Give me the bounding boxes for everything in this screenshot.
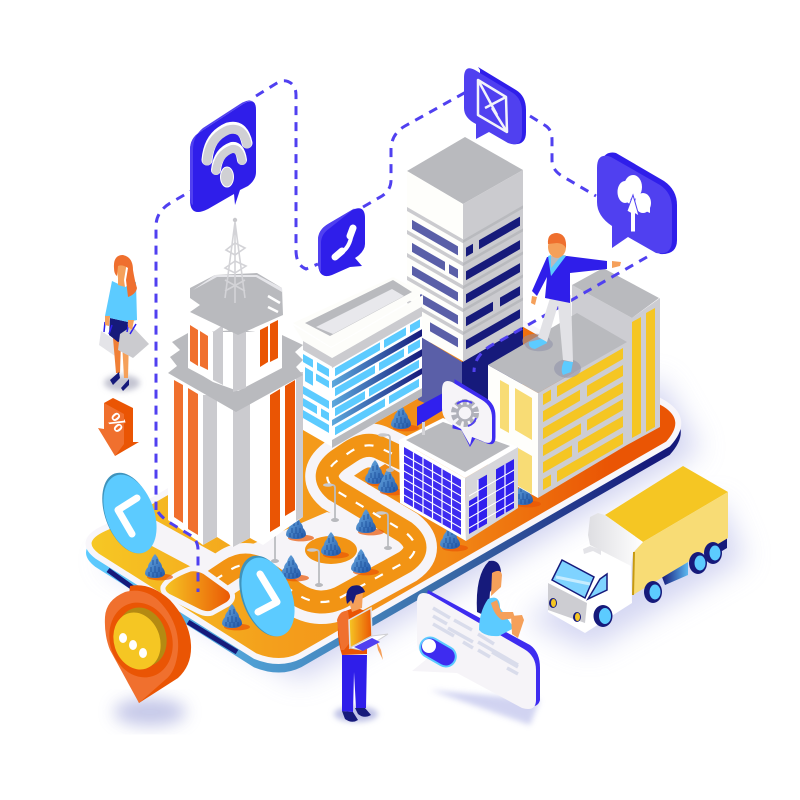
front leg — [122, 338, 129, 378]
handset ends — [335, 228, 353, 257]
cargo roof — [605, 466, 728, 542]
left navigation button — [92, 465, 167, 561]
blouse — [105, 281, 137, 322]
phone screen surface — [89, 310, 678, 661]
plaza and road — [150, 445, 415, 614]
front block roof — [488, 313, 627, 393]
arm and legs — [491, 600, 515, 620]
rear block roof — [572, 268, 659, 318]
sleeve — [337, 611, 352, 650]
location pin — [100, 585, 191, 703]
neck and face — [349, 590, 363, 612]
rear block face — [572, 285, 660, 445]
left bag — [99, 331, 115, 356]
cuff — [606, 260, 612, 269]
grey columns — [203, 372, 303, 547]
cloud upload speech bubble — [597, 152, 677, 254]
toggle switch — [417, 634, 459, 670]
bubble side — [453, 380, 495, 446]
seated woman — [477, 561, 524, 638]
pin inner ring — [100, 594, 182, 686]
wifi speech bubble — [190, 100, 256, 212]
legs — [538, 295, 573, 362]
roof deck — [406, 422, 510, 472]
top roof — [190, 273, 283, 335]
bubble body — [318, 208, 365, 276]
small glass office — [399, 418, 518, 541]
windshield — [552, 560, 594, 598]
chevron — [118, 498, 137, 534]
bubble side — [478, 67, 526, 144]
left windows — [404, 447, 461, 535]
roof light panel — [316, 289, 404, 334]
cab deflector — [588, 513, 643, 566]
cloud icon — [618, 175, 651, 213]
forearm — [376, 640, 383, 660]
upper right windows — [260, 320, 278, 367]
blue brick building — [293, 277, 423, 448]
skirt — [109, 318, 128, 342]
bubble edge — [318, 208, 355, 272]
wifi icon — [207, 127, 247, 187]
rear yellow stripes — [632, 308, 655, 438]
orange striped skyscraper — [168, 218, 303, 547]
floors left face — [407, 207, 463, 361]
roof rim — [293, 277, 423, 347]
yellow bricks — [543, 348, 623, 490]
grey grille — [548, 583, 587, 623]
gear icon — [454, 401, 476, 426]
hood mark — [583, 546, 601, 555]
cab body — [548, 543, 632, 633]
hair — [548, 233, 566, 248]
collar — [548, 255, 566, 276]
jacket — [532, 256, 607, 303]
road dashes — [212, 445, 415, 602]
shoe shadows — [522, 334, 581, 378]
face — [491, 571, 502, 596]
envelope speech bubble — [464, 67, 526, 144]
top block left — [407, 171, 463, 240]
front block left face — [488, 365, 538, 498]
percent sign: % — [102, 409, 131, 437]
dress — [479, 598, 514, 636]
navy base overlap — [463, 327, 523, 380]
panel side — [420, 590, 540, 706]
chat dots — [119, 633, 147, 658]
shoes — [529, 338, 573, 375]
bag handles — [104, 322, 136, 334]
shoes — [110, 372, 129, 391]
rear bumper — [715, 538, 727, 551]
bubble face — [442, 381, 492, 445]
home button — [163, 569, 233, 614]
shirt — [550, 255, 566, 276]
upper block shading — [213, 325, 246, 392]
laptop keyboard — [354, 638, 380, 651]
trousers — [342, 655, 367, 712]
headlights — [549, 598, 581, 622]
side window — [588, 574, 607, 599]
upper block — [188, 320, 282, 391]
man on rooftop — [522, 233, 621, 378]
chat panel with toggle — [412, 590, 540, 709]
vest — [338, 607, 367, 655]
plaza circular garden — [305, 536, 357, 564]
top block right — [463, 170, 523, 240]
hair — [346, 585, 365, 604]
dashed connector lines — [156, 81, 647, 592]
pin back — [122, 585, 191, 703]
roof — [399, 418, 518, 478]
plaza paving — [150, 512, 405, 598]
roof recess — [305, 280, 412, 336]
right navigation button — [229, 548, 305, 644]
phone side buttons — [108, 570, 237, 652]
right windows — [469, 459, 514, 534]
trailer underside — [662, 562, 688, 585]
upper left windows — [190, 325, 208, 370]
gear speech bubble — [442, 380, 495, 446]
tower base right — [462, 327, 522, 420]
inner garden patch — [362, 464, 415, 498]
hair — [477, 561, 501, 617]
phone platform — [89, 310, 678, 670]
blue box at tower foot — [417, 392, 445, 426]
windshield glare — [556, 577, 590, 584]
lower leg — [511, 615, 524, 638]
button rim — [92, 465, 166, 561]
roof parapet — [193, 275, 282, 292]
handset icon — [338, 232, 352, 254]
arrow face — [98, 403, 124, 456]
left face — [399, 440, 466, 541]
wheels — [594, 542, 722, 627]
text lines — [433, 608, 518, 674]
tower base left — [418, 335, 462, 420]
envelope icon — [478, 80, 507, 132]
shoes — [342, 708, 371, 722]
right face — [465, 447, 518, 541]
man with laptop — [337, 585, 388, 722]
roof — [407, 137, 523, 204]
laptop screen — [349, 608, 372, 648]
roof vent — [422, 422, 425, 435]
hands — [531, 261, 621, 305]
lower body white — [168, 372, 303, 547]
shopping woman — [99, 255, 149, 391]
back leg — [113, 338, 121, 373]
delivery truck — [548, 466, 728, 633]
right face — [332, 306, 422, 448]
bubble face — [597, 156, 672, 253]
discount arrow icon — [98, 398, 139, 456]
upload arrow — [627, 195, 639, 232]
pin front — [105, 591, 178, 703]
phone side edge — [89, 319, 678, 670]
navy striped tower — [407, 137, 523, 426]
button face — [231, 550, 305, 644]
left face — [303, 340, 332, 447]
orange road — [212, 445, 415, 602]
head — [548, 236, 566, 258]
bubble body — [190, 101, 256, 212]
button rim — [229, 548, 303, 644]
front block right face — [538, 342, 627, 498]
front left windows — [500, 380, 532, 494]
roof front rim — [293, 295, 423, 358]
bubble face — [464, 68, 522, 144]
antenna mast — [225, 218, 246, 303]
roof ledge marks — [268, 296, 280, 312]
button face — [93, 467, 167, 561]
right bag — [118, 326, 149, 358]
stepped grey roof — [168, 330, 303, 412]
bubble side — [600, 152, 677, 254]
cargo edge — [633, 552, 634, 595]
arms — [105, 316, 134, 330]
yellow disc — [106, 606, 168, 676]
street trees — [145, 405, 541, 630]
street lamps — [263, 433, 394, 587]
hair — [114, 255, 137, 297]
bubble edge — [190, 100, 253, 205]
floors right face — [463, 205, 523, 362]
left orange stripes — [174, 380, 198, 535]
road verge — [212, 445, 415, 602]
chevron — [258, 574, 277, 612]
drop shadows — [100, 375, 745, 726]
phone speech bubble — [318, 208, 365, 276]
cargo side — [633, 492, 728, 595]
laptop base — [350, 634, 388, 650]
toggle knob — [422, 639, 436, 653]
arrow side — [104, 398, 139, 456]
panel face — [412, 593, 536, 709]
yellow disc rim — [110, 601, 174, 673]
right orange stripes — [270, 380, 295, 532]
face — [116, 262, 127, 287]
yellow building — [488, 268, 660, 498]
